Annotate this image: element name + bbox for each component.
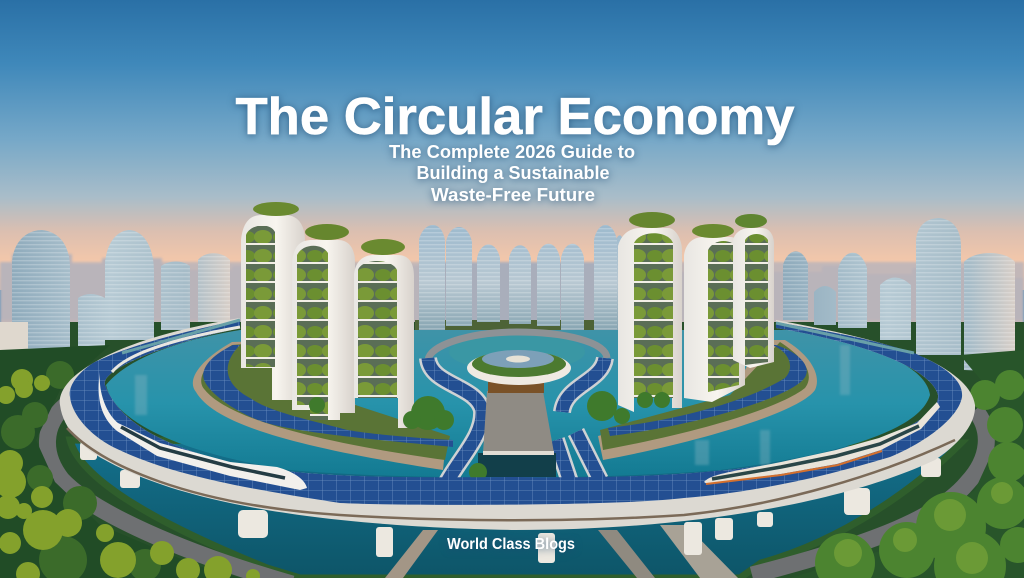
green tower: left 3 (354, 239, 414, 428)
distant hazy skyline (0, 254, 1024, 332)
viaduct support pillars (80, 442, 941, 563)
island: left crescent (193, 340, 453, 470)
green tower: right 1 (618, 212, 682, 412)
subtitle: Waste-Free Future (431, 185, 595, 205)
train: left (99, 320, 307, 490)
title: The Circular Economy (236, 88, 795, 146)
green tower: right 3 (733, 214, 774, 368)
train: right (704, 323, 940, 484)
small trees on islands (309, 391, 670, 481)
green tower: left 2 (292, 224, 355, 420)
amber light on the ground between towers (415, 320, 615, 340)
water sky reflections (135, 345, 850, 465)
tree cluster: bottom left (0, 345, 260, 578)
background: sky (0, 0, 1024, 290)
inner water (106, 330, 930, 478)
ground behind the city (0, 322, 1024, 578)
island: right crescent (598, 340, 817, 460)
subtitle: Building a Sustainable (416, 163, 610, 183)
tree cluster: bottom right (790, 350, 1024, 578)
brand label: World Class Blogs (447, 536, 575, 553)
outer ring viaduct deck (60, 318, 975, 530)
ring solar panels (70, 320, 962, 505)
lower water under the ring (70, 440, 961, 578)
roads around the ring (47, 405, 986, 578)
central plaza with round pavilion (467, 350, 571, 477)
green tower: left 1 (241, 202, 305, 400)
glass towers: right group (783, 218, 1015, 372)
subtitle (389, 142, 635, 205)
green tower: right 2 (684, 224, 745, 402)
viaduct edge line (67, 428, 955, 520)
glass towers: central row (419, 225, 624, 340)
central pond and curved walkways (428, 332, 607, 482)
glass towers: left group (0, 230, 230, 370)
lower bridges (385, 525, 738, 578)
subtitle: The Complete 2026 Guide to (389, 142, 635, 162)
